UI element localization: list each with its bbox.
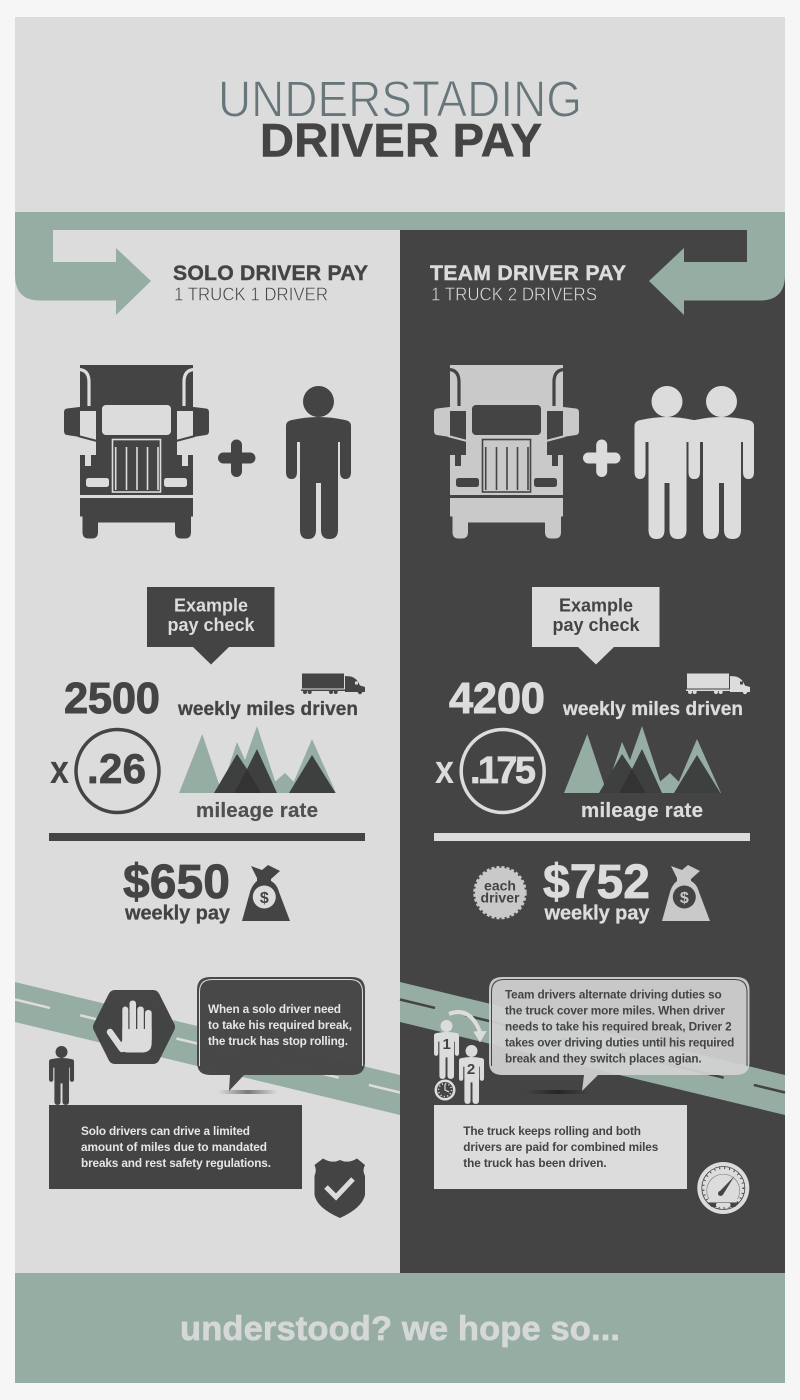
- icon: mountains: [179, 726, 336, 793]
- badge: rate .175: [461, 730, 544, 812]
- panel: title header: [15, 17, 785, 212]
- callout: solo bubble: When a solo driver need: [208, 1002, 341, 1016]
- text box: team explanation: [434, 1105, 687, 1189]
- text box: solo explanation: amount of miles due to mandated: [81, 1140, 267, 1154]
- result: weekly pay: weekly pay: [544, 902, 650, 924]
- label: weekly miles driven: weekly miles driven: [177, 699, 358, 720]
- icon: plus: [224, 445, 250, 472]
- icon: clock: [434, 1080, 456, 1100]
- icon: driver 1: 1: [443, 1036, 451, 1053]
- icon: driver 2: 2: [467, 1061, 475, 1078]
- callout: team bubble: Team drivers alternate driving duties so: [505, 988, 722, 1002]
- heading: team driver pay: TEAM DRIVER PAY: [430, 262, 626, 285]
- callout: solo bubble: the truck has stop rolling.: [208, 1034, 348, 1048]
- road: [15, 982, 400, 1115]
- multiply sign: x: [435, 748, 454, 792]
- callout: solo bubble: [197, 977, 365, 1091]
- panel: team driver: [400, 212, 785, 1273]
- icon: small driver: [49, 1046, 74, 1105]
- footer text: understood? we hope so...: [180, 1310, 620, 1348]
- icon: stop hand: [100, 997, 168, 1057]
- callout: team bubble: [489, 977, 750, 1091]
- icon: swap arrow: [449, 1012, 487, 1042]
- result: weekly pay: $752: [543, 856, 650, 909]
- road: [400, 982, 785, 1115]
- text box: solo explanation: breaks and rest safety regulations.: [81, 1156, 271, 1170]
- callout: team bubble: takes over driving duties until his required: [505, 1036, 734, 1050]
- callout: example pay check: [147, 587, 274, 664]
- arrow: solo header arrow: [15, 212, 400, 315]
- callout: example pay check: Example: [174, 596, 248, 616]
- callout: example pay check: [532, 587, 660, 664]
- callout: example pay check: pay check: [167, 615, 256, 635]
- panel: solo driver: [15, 212, 400, 1273]
- callout: solo bubble: to take his required break,: [208, 1018, 352, 1032]
- icon: money bag: $: [260, 890, 269, 907]
- result: weekly pay: $650: [123, 856, 230, 909]
- icon: truck front: [64, 365, 209, 538]
- title line 1: UNDERSTADING: [218, 70, 582, 128]
- icon: money bag: $: [680, 890, 689, 907]
- icon: money bag: [242, 865, 290, 921]
- heading: solo driver pay: 1 TRUCK 1 DRIVER: [174, 284, 328, 304]
- text box: team explanation: the truck has been driven.: [463, 1156, 607, 1170]
- badge: rate .175: .175: [470, 750, 536, 792]
- callout: example pay check: pay check: [552, 615, 641, 635]
- title line 2: DRIVER PAY: [260, 114, 542, 166]
- text box: solo explanation: [49, 1105, 302, 1189]
- heading: solo driver pay: SOLO DRIVER PAY: [173, 262, 368, 285]
- multiply sign: x: [50, 748, 69, 792]
- badge: rate .26: .26: [87, 745, 146, 792]
- icon: truck front: [434, 365, 579, 538]
- callout: team bubble: needs to take his required break, Driver 2: [505, 1020, 732, 1034]
- divider: [49, 833, 365, 841]
- callout: example pay check: Example: [559, 596, 633, 616]
- icon: safety shield: [314, 1158, 365, 1218]
- text box: solo explanation: Solo drivers can drive a limited: [81, 1124, 250, 1138]
- icon: semi truck: [301, 674, 365, 694]
- shadow under bubble: [218, 1090, 278, 1094]
- callout: team bubble: the truck cover more miles. When driver: [505, 1004, 725, 1018]
- icon: speedometer: [697, 1162, 749, 1214]
- text box: team explanation: The truck keeps rolling and both: [463, 1124, 641, 1138]
- heading: team driver pay: 1 TRUCK 2 DRIVERS: [431, 284, 597, 304]
- icon: money bag: [662, 865, 710, 921]
- icon: two drivers: [634, 386, 754, 539]
- label: mileage rate: mileage rate: [581, 799, 703, 822]
- number: 2500 miles: 2500: [64, 675, 160, 723]
- heading: solo driver pay: [173, 262, 368, 304]
- shadow under bubble: [525, 1090, 590, 1094]
- icon: mountains: [564, 726, 721, 793]
- label: mileage rate: mileage rate: [196, 799, 318, 822]
- heading: team driver pay: [430, 262, 626, 304]
- icon: driver 2: [459, 1045, 484, 1104]
- icon: plus: [588, 445, 615, 472]
- arrow: team header arrow: [400, 212, 785, 315]
- result: weekly pay: weekly pay: [124, 902, 231, 924]
- badge: each driver: [475, 868, 525, 918]
- footer banner: [15, 1273, 785, 1383]
- badge: each driver: each: [484, 878, 516, 894]
- divider: [434, 833, 750, 841]
- icon: driver 1: [434, 1020, 459, 1079]
- icon: driver: [286, 386, 351, 539]
- label: weekly miles driven: weekly miles driven: [562, 699, 743, 720]
- badge: rate .26: [76, 730, 159, 812]
- text box: team explanation: drivers are paid for combined miles: [463, 1140, 659, 1154]
- icon: semi truck: [686, 674, 750, 694]
- number: 4200 miles: 4200: [449, 675, 545, 723]
- badge: each driver: driver: [481, 890, 520, 906]
- callout: team bubble: break and they switch places agian.: [505, 1052, 702, 1066]
